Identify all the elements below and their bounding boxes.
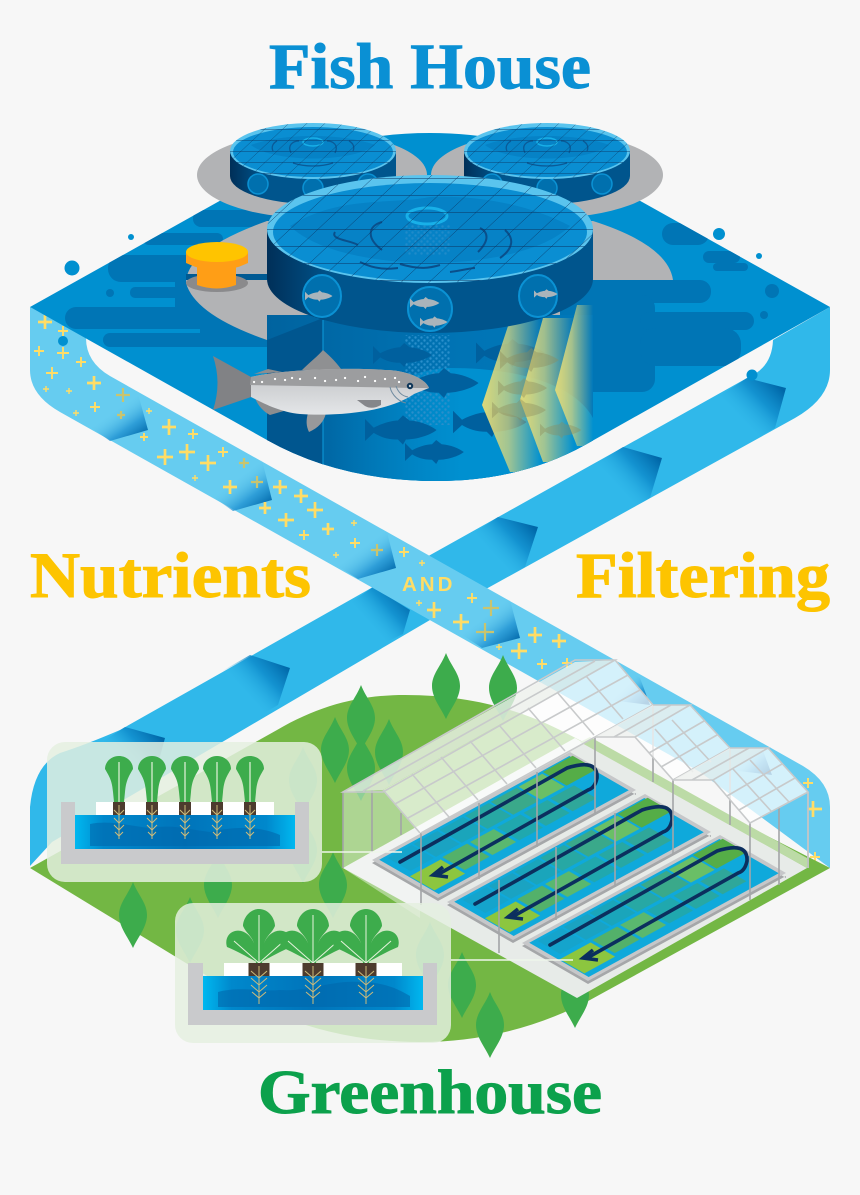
gray pad: back right tank — [431, 132, 663, 218]
panel: fish house platform — [30, 133, 830, 481]
back right tank — [464, 123, 630, 204]
roof 3 — [673, 748, 808, 868]
porthole left — [303, 275, 341, 317]
green floor strip — [580, 737, 807, 868]
heading: greenhouse: Greenhouse — [258, 1059, 602, 1127]
nutrient plus signs — [34, 315, 822, 862]
ribbon: filtering flow, right top to lower left — [30, 307, 830, 866]
greenhouse — [343, 660, 808, 998]
raised bed 3 — [522, 835, 786, 984]
decorative leaves — [119, 653, 589, 1058]
front tank — [267, 175, 593, 333]
filter chevrons — [482, 305, 593, 472]
greenhouse posts — [343, 705, 808, 953]
heading: nutrients: Nutrients — [30, 540, 311, 612]
greenhouse floor — [343, 738, 807, 998]
back left tank — [230, 123, 396, 204]
title: fish house: Fish House — [269, 31, 591, 103]
heading: filtering: Filtering — [576, 540, 830, 612]
icon: salmon — [213, 350, 429, 432]
raised bed 1 — [372, 752, 636, 901]
gray pad: back left tank — [197, 132, 427, 218]
callout: small seedlings bed — [47, 742, 402, 882]
underwater fish school — [365, 339, 545, 464]
gable walls — [343, 790, 420, 918]
underwater tank section — [267, 315, 593, 490]
gray pad: front tank — [186, 221, 673, 340]
roof 2 — [595, 705, 730, 780]
and label: AND — [402, 573, 455, 596]
porthole middle — [408, 287, 452, 331]
callout: mature plants bed — [175, 903, 573, 1043]
roof 1 — [343, 660, 653, 833]
ribbon: nutrients flow, left top to lower right — [30, 307, 830, 868]
raised bed 2 — [447, 794, 711, 943]
porthole right — [519, 275, 558, 317]
panel: greenhouse green ground — [30, 695, 830, 1042]
icon: yellow valve — [186, 242, 267, 292]
